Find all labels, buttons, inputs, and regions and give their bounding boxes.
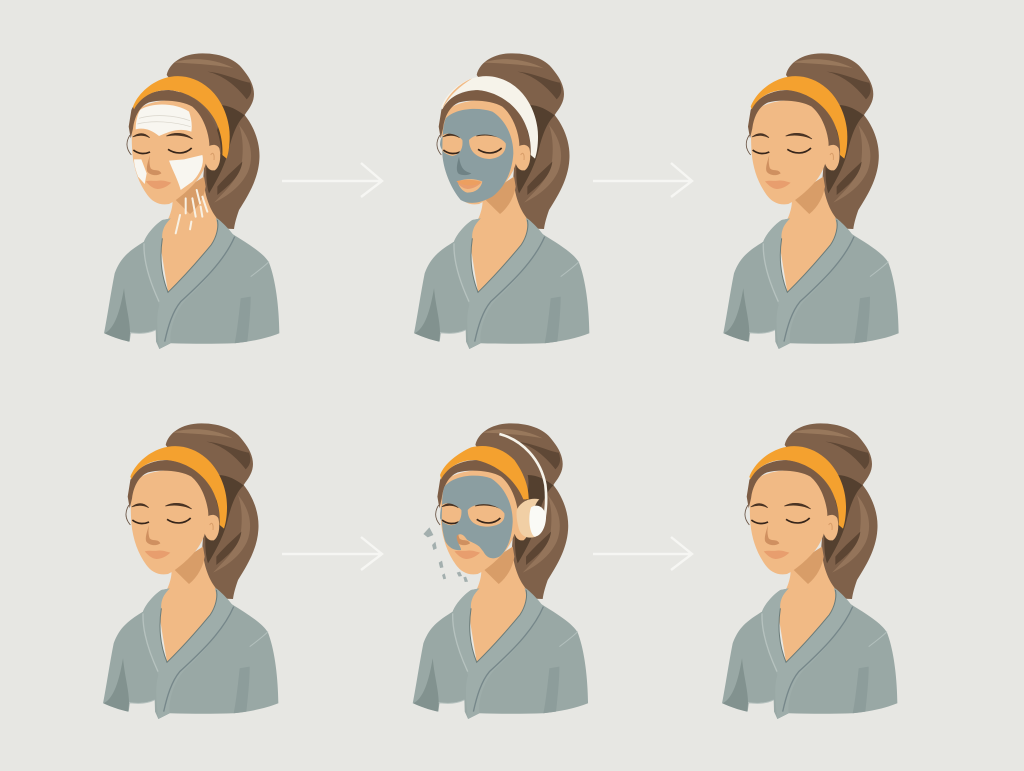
figure 6: finished glowing face	[722, 423, 897, 719]
headband: orange	[749, 446, 846, 529]
cream streaks on neck	[176, 190, 207, 233]
cream on right cheek	[169, 155, 203, 190]
figure 1: cream applied to face and neck	[104, 53, 279, 349]
figure 5: mask flaking off, headphones	[413, 423, 588, 719]
cream on forehead	[136, 105, 192, 136]
headband: orange	[440, 446, 529, 499]
grey face mask, peeling	[440, 476, 513, 558]
arrow 1	[282, 163, 382, 197]
cream on left cheek	[134, 159, 147, 184]
mask flakes falling	[423, 527, 468, 582]
headband: orange	[130, 446, 227, 529]
arrow 2	[593, 163, 692, 197]
headband: white	[441, 76, 538, 159]
headband: orange	[751, 76, 847, 159]
figure 2: grey clay mask, white headband	[414, 53, 589, 349]
arrow 3	[282, 537, 382, 570]
grey face mask	[440, 109, 513, 203]
figure 3: clean face with orange headband	[723, 53, 899, 349]
headphones	[499, 434, 546, 538]
headband: orange	[133, 76, 230, 159]
arrow 4	[593, 537, 692, 570]
figure 4: relaxed face with orange headband	[103, 423, 278, 719]
